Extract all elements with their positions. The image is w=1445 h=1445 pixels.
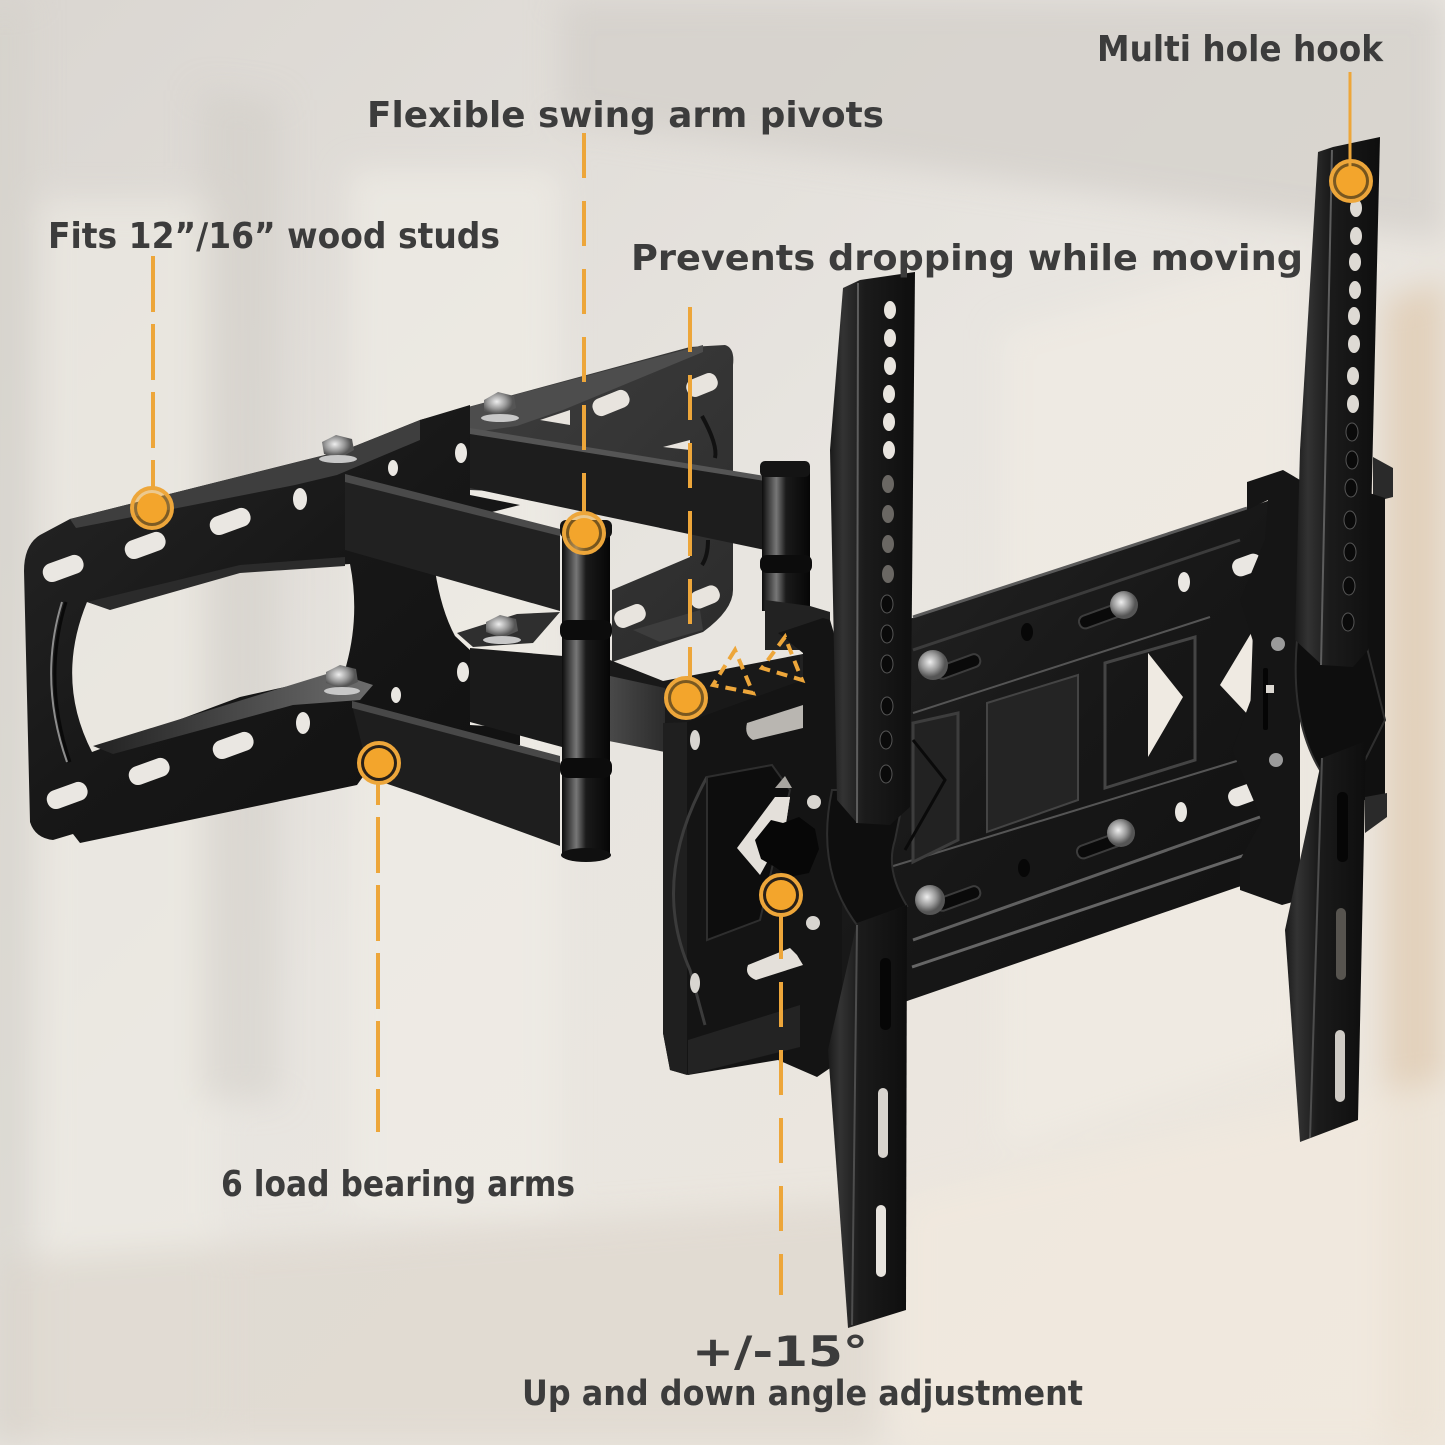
tilt lock knob (755, 817, 819, 877)
wall plate: left half (24, 405, 520, 843)
callout: load bearing arms: 6 load bearing arms (221, 1164, 575, 1205)
rear arm pivot (760, 461, 830, 650)
front arm pivot (560, 520, 612, 862)
TV rail (800, 457, 1393, 1040)
wall plate: right half (420, 345, 733, 662)
tilt bracket (663, 618, 842, 1077)
hex bolts (319, 392, 521, 695)
callout: prevents dropping: Prevents dropping while moving (631, 238, 1303, 279)
right rail bracket (1232, 470, 1300, 905)
left vertical TV bracket (828, 272, 915, 1328)
callout: wood studs (48, 216, 500, 528)
lower front arm (352, 701, 560, 846)
dashed tilt triangles (713, 637, 802, 693)
callout: angle adjustment: Up and down angle adjustment (522, 1374, 1083, 1414)
back swing arm (470, 428, 765, 550)
right hinge (1296, 640, 1385, 770)
callout: flexible swing arm pivots: Flexible swing arm pivots (367, 95, 884, 136)
callout: angle adjustment (522, 875, 1083, 1414)
callout: load bearing arms (221, 743, 575, 1205)
left hinge (827, 790, 907, 925)
callout: flexible swing arm pivots (367, 95, 884, 553)
callout: wood studs: Fits 12”/16” wood studs (48, 216, 500, 257)
callout: multi hole hook: Multi hole hook (1097, 29, 1384, 70)
mid lower arm (457, 612, 610, 760)
upper front arm (345, 474, 560, 611)
callout: angle adjustment: +/-15° (692, 1327, 868, 1376)
front arm top surface (578, 654, 803, 752)
right vertical TV bracket (1285, 137, 1380, 1142)
callout: multi hole hook (1097, 29, 1384, 201)
callout: prevents dropping (631, 238, 1303, 718)
